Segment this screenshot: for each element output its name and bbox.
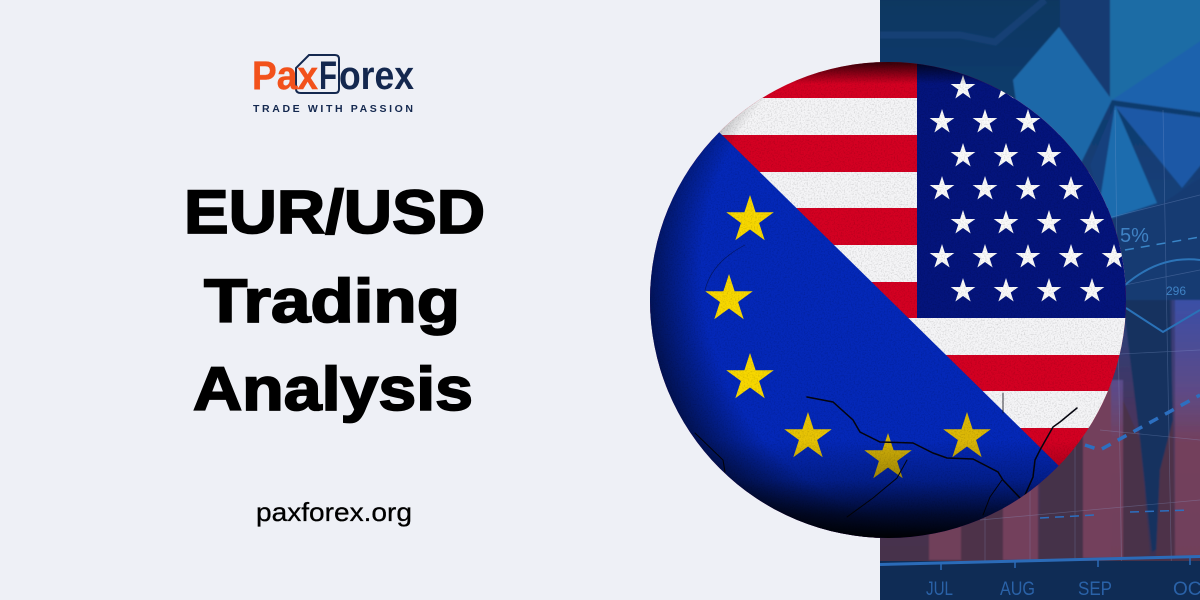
logo box [296,55,339,93]
website url: paxforex.org [256,497,412,527]
title: EUR/USD [184,178,485,246]
panel: financial chart backdrop [875,0,1200,600]
chart imagery [875,0,1200,600]
top shadow [792,62,982,83]
grunge texture [650,62,1126,538]
logo wordmark: Pax: Pax [252,54,318,98]
chart labels: SEP [1078,579,1112,600]
logo wordmark: F: F [319,54,337,98]
circular flag badge [650,62,1126,538]
chart lines [1040,237,1200,518]
bottom shadow [710,446,1074,538]
US stripes [640,60,1140,540]
cracks [695,245,1077,517]
title: Trading [204,267,460,335]
chart labels: 296 [1166,284,1186,298]
chart labels: 5% [1120,225,1149,247]
US stars [930,75,1126,302]
title: Analysis [193,355,473,423]
logo [252,54,414,115]
title [184,178,485,423]
edge vignette [650,99,878,538]
chart grid [980,110,1200,600]
chart axis [880,555,1200,600]
EU stars [705,195,991,478]
logo tagline: TRADE WITH PASSION [253,103,413,115]
US canton [917,60,1137,318]
chart labels [926,225,1200,600]
EU flag triangle [650,132,1059,538]
chart labels: AUG [1000,579,1035,600]
logo wordmark: orex: orex [339,54,414,98]
chart labels: JUL [926,579,953,600]
